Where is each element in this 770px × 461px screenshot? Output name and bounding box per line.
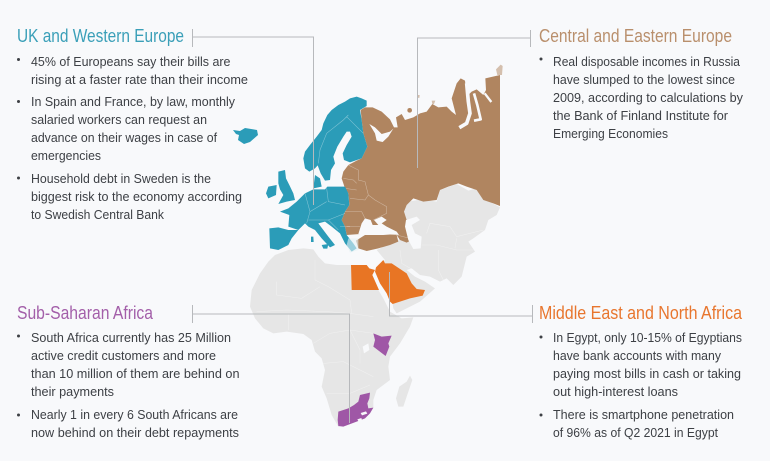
panel: Middle East and North Africa [539, 303, 743, 440]
map [233, 65, 503, 427]
Arctic gulf slits [459, 83, 470, 128]
text block: bullets: paying most bills in cash or taking [553, 366, 741, 381]
region: brown Central and Eastern Europe [342, 65, 503, 251]
White Sea [369, 124, 393, 142]
connector: Central and Eastern Europe [418, 30, 530, 168]
text block: bullets [540, 54, 743, 141]
icon: Iceland [233, 128, 258, 144]
text block: bullets: active credit customers and more [31, 348, 216, 363]
text block: bullets: to Swedish Central Bank [31, 207, 164, 222]
text block: bullets: biggest risk to the economy according [31, 189, 242, 204]
text block: bullets: salaried workers can request an [31, 112, 207, 127]
text block: bullets: emergencies [31, 148, 101, 163]
region: purple Sub-Saharan Africa [338, 333, 392, 427]
text block: bullets: Real disposable incomes in Russia [553, 54, 741, 69]
text block: bullets: the Bank of Finland Institute for [553, 108, 729, 123]
text block: bullets: There is smartphone penetration [553, 407, 734, 422]
panel: UK and Western Europe [17, 26, 248, 222]
text block: bullets: In Spain and France, by law, monthly [31, 94, 235, 109]
text block: bullets [540, 330, 742, 440]
connector: Sub-Saharan Africa [192, 305, 350, 423]
text block: bullets: their payments [31, 384, 114, 399]
text block: bullets [17, 330, 240, 440]
connector: Middle East and North Africa [390, 272, 532, 323]
region: grey Africa [250, 248, 413, 427]
text block: bullets: 45% of Europeans say their bills are [31, 54, 230, 69]
text block: bullets: In Egypt, only 10-15% of Egyptians [553, 330, 742, 345]
panel: Central and Eastern Europe [539, 26, 743, 141]
text block: bullets: of 96% as of Q2 2021 in Egypt [553, 425, 718, 440]
text block: bullets: have bank accounts with many [553, 348, 721, 363]
connector: UK and Western Europe [192, 29, 314, 205]
text block: bullets: Nearly 1 in every 6 South Africans are [31, 407, 238, 422]
Caspian Sea [405, 217, 422, 249]
text block: bullets: Household debt in Sweden is the [31, 171, 211, 186]
text block: bullets: Emerging Economies [553, 126, 668, 141]
region: grey Central Asia and Middle East [377, 184, 500, 313]
text block: bullets: now behind on their debt repayments [31, 425, 239, 440]
text block: bullets: have slumped to the lowest since [553, 72, 735, 87]
region: orange Middle East and North Africa [351, 260, 425, 304]
region: teal UK and Western Europe [266, 97, 367, 253]
heading: UK and Western Europe: UK and Western Europe [17, 26, 184, 46]
text block: bullets: 2009, according to calculations by [553, 90, 743, 105]
heading: Middle East and North Africa: Middle East and North Africa [539, 303, 743, 323]
heading: Central and Eastern Europe: Central and Eastern Europe [539, 26, 732, 46]
text block: bullets: rising at a faster rate than their income [31, 72, 248, 87]
text block: bullets: than 10 million of them are behind on [31, 366, 240, 381]
heading: Sub-Saharan Africa: Sub-Saharan Africa [17, 303, 154, 323]
panel: Sub-Saharan Africa [17, 303, 240, 440]
text block: bullets: out high-interest loans [553, 384, 678, 399]
text block: bullets: South Africa currently has 25 Million [31, 330, 231, 345]
text block: bullets [17, 54, 248, 222]
text block: bullets: advance on their wages in case of [31, 130, 217, 145]
Black Sea [358, 217, 399, 235]
